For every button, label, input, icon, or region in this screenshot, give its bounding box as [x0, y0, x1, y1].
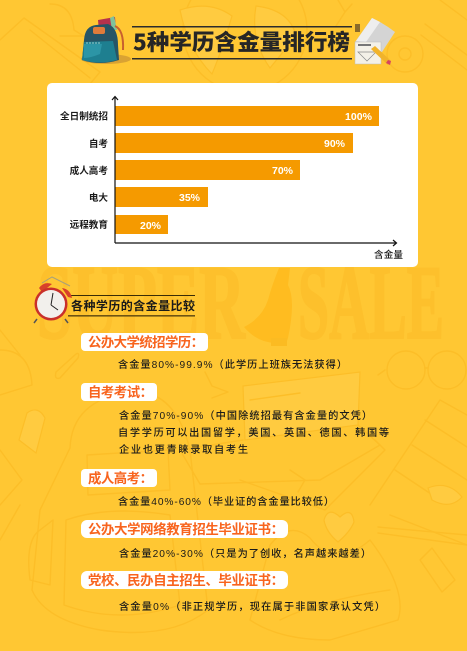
label pill: 自考考试：: [88, 384, 153, 400]
bar: 全日制统招 100%: 100%: [345, 111, 373, 123]
description: 自学学历可以出国留学，美国、英国、德国、韩国等: [118, 426, 389, 439]
icon: backpack: [81, 16, 131, 64]
label pill: 党校、民办自主招生、毕业证书：: [88, 572, 284, 588]
chart axes: [112, 96, 396, 246]
label pill: 公办大学统招学历：: [88, 334, 204, 350]
bar: 远程教育 20%: 远程教育: [70, 219, 108, 231]
bar: 远程教育 20%: [70, 215, 168, 234]
bar: 成人高考 70%: [70, 160, 300, 180]
bar: 成人高考 70%: 70%: [272, 165, 294, 177]
description: 企业也更青睐录取自考生: [119, 443, 248, 456]
title text: 5种学历含金量排行榜: [133, 25, 350, 57]
heading text: 各种学历的含金量比较: [71, 298, 195, 313]
bar: 电大 35%: 35%: [179, 192, 201, 204]
description: 含金量80%-99.9%（此学历上班族无法获得）: [118, 358, 347, 371]
description: 含金量40%-60%（毕业证的含金量比较低）: [118, 495, 334, 508]
bar: 自考 90%: [89, 133, 353, 153]
description: 含金量20%-30%（只是为了创收，名声越来越差）: [119, 547, 371, 560]
bar: 成人高考 70%: 成人高考: [70, 165, 108, 177]
bar: 电大 35%: [89, 187, 208, 207]
bar: 全日制统招 100%: 全日制统招: [60, 110, 108, 122]
item: 自考考试: [81, 383, 389, 456]
description: 含金量70%-90%（中国除统招最有含金量的文凭）: [119, 409, 372, 422]
icon: notepad and pencil: [355, 18, 395, 65]
heading rules: [68, 295, 195, 317]
bar: 全日制统招 100%: [60, 106, 379, 126]
x-axis label: 含金量: [374, 249, 403, 261]
label pill: 成人高考：: [88, 470, 153, 486]
item: 成人高考: [81, 469, 334, 508]
section heading: [34, 277, 195, 323]
bar: 自考 90%: 自考: [89, 138, 108, 150]
icon: alarm clock: [34, 277, 72, 323]
bar: 电大 35%: 电大: [89, 192, 108, 204]
title rules: [132, 26, 352, 60]
bar: 自考 90%: 90%: [324, 138, 346, 150]
label pill: 公办大学网络教育招生毕业证书：: [88, 521, 284, 537]
panel: bar chart card: [47, 83, 418, 267]
background pattern of school supplies: SUPER: [37, 244, 246, 361]
description: [118, 409, 389, 456]
title banner: [81, 16, 395, 65]
bar: 远程教育 20%: 20%: [140, 220, 162, 232]
item: 党校、民办自主招生、毕业证书: [81, 571, 385, 613]
item: 公办大学网络教育招生毕业证书: [81, 520, 371, 560]
description: 含金量0%（非正规学历，现在属于非国家承认文凭）: [119, 600, 385, 613]
item: 公办大学统招学历: [81, 333, 347, 371]
